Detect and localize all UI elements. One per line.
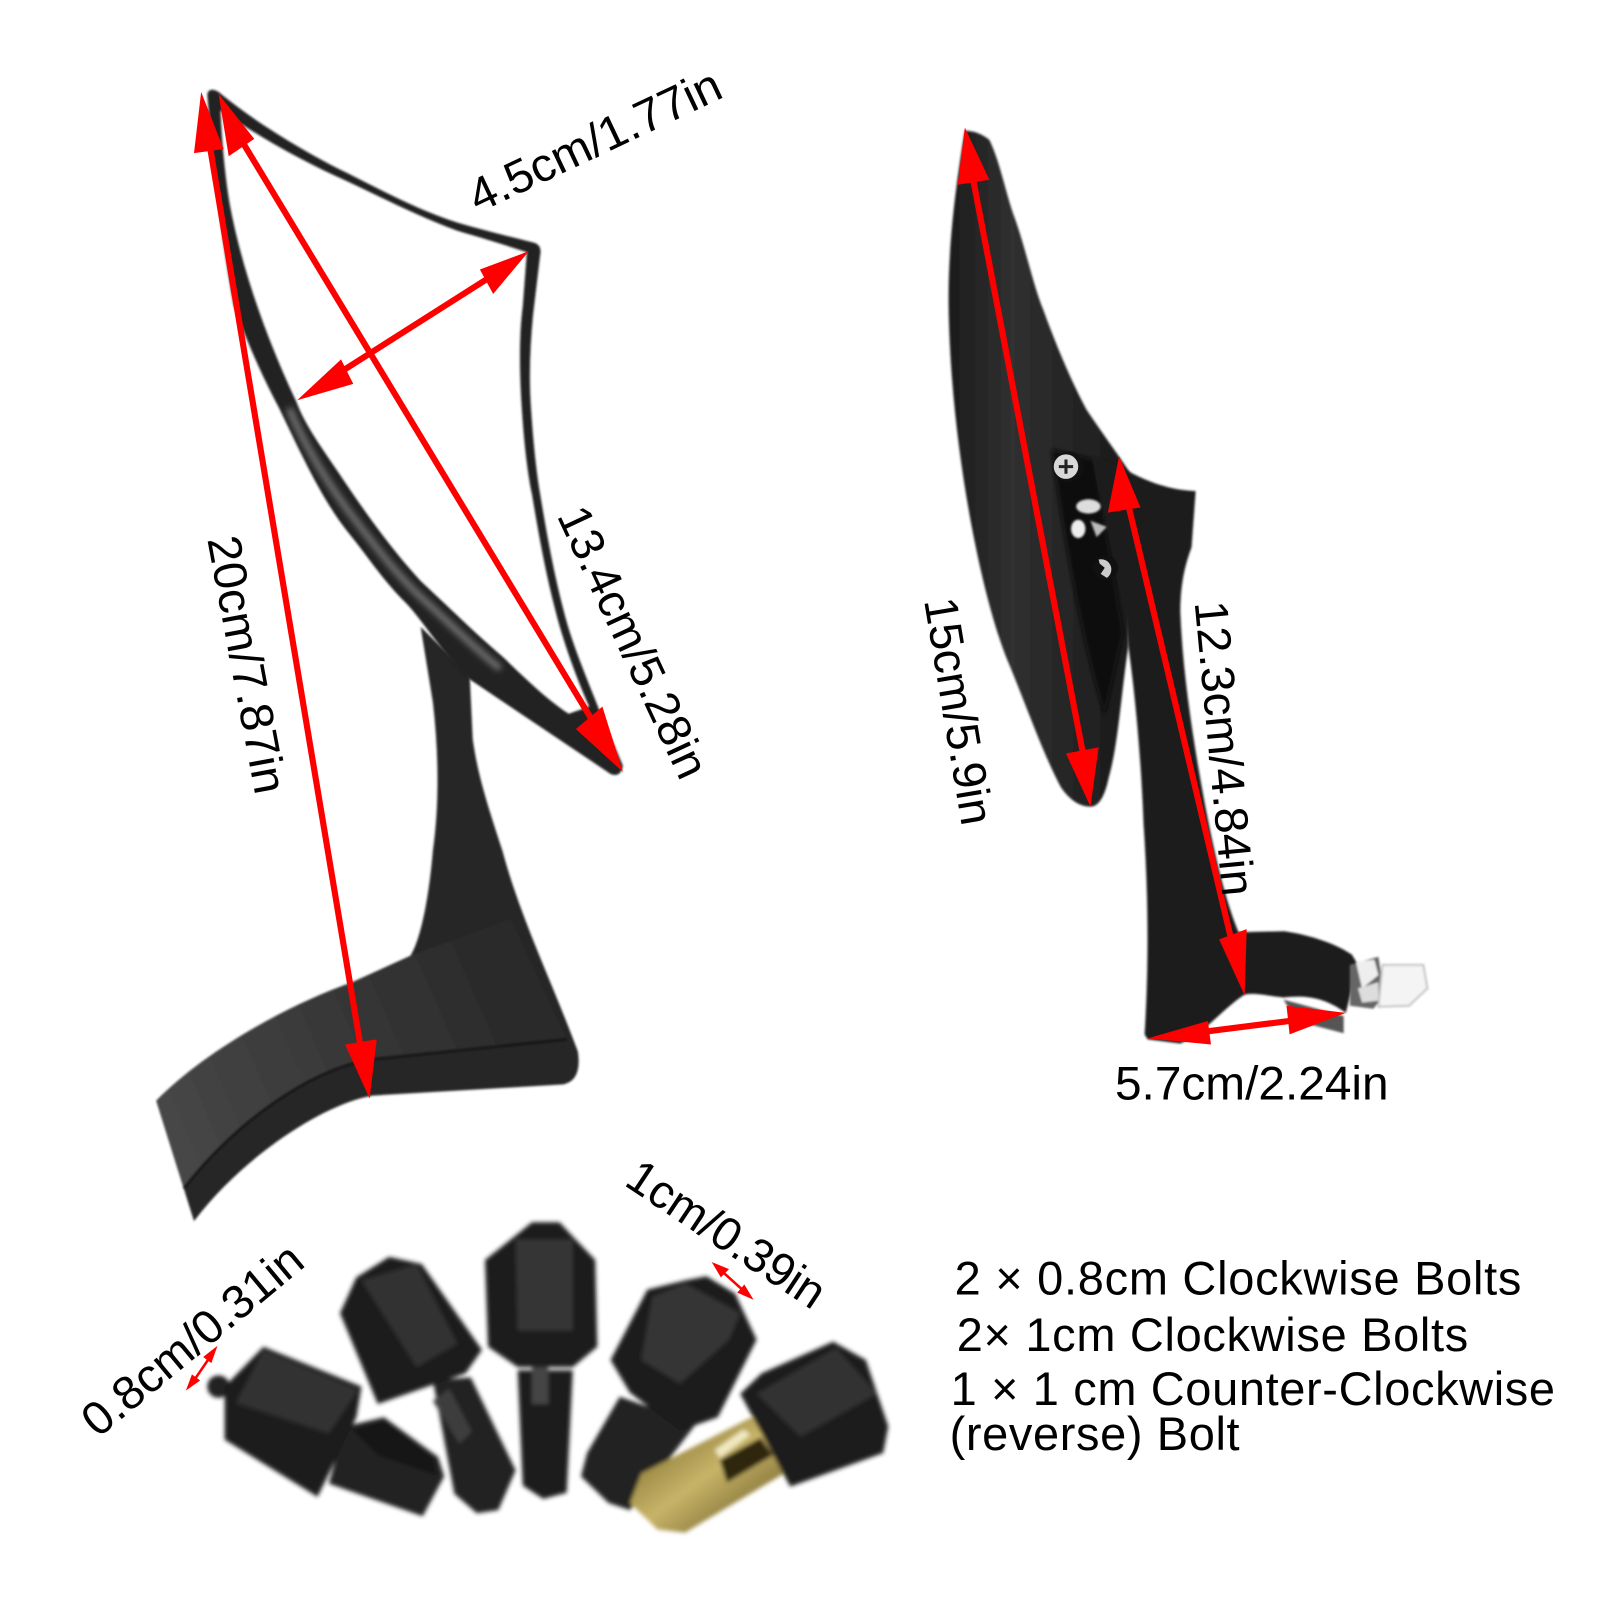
bolt 3	[485, 1222, 597, 1499]
label: 12.3cm: 12.3cm/4.84in	[1185, 598, 1265, 898]
mirror stand	[156, 627, 579, 1221]
head shading	[1052, 449, 1123, 715]
bolt 5 with gold thread	[630, 1342, 888, 1533]
label: 15cm: 15cm/5.9in	[914, 593, 1004, 829]
label: 20cm height: 20cm/7.87in	[197, 531, 298, 798]
stem and arm	[1091, 455, 1358, 1044]
arrow: overall height 20cm	[194, 92, 377, 1099]
arrow: stem length 12.3cm	[1108, 456, 1247, 996]
arrow: arm width 5.7cm	[1148, 1006, 1346, 1045]
arrow: mirror length 13.4cm	[219, 94, 623, 772]
list line 1: 2 × 0.8cm Clockwise Bolts	[955, 1252, 1521, 1305]
label: 1cm bolt: 1cm/0.39in	[617, 1149, 836, 1319]
arrow: mirror width 4.5cm	[297, 251, 529, 400]
bolt 1	[207, 1347, 444, 1516]
screw: middle	[1071, 499, 1107, 538]
screw: top	[1053, 451, 1083, 482]
mirror frame	[207, 90, 623, 775]
screw: bottom	[1094, 555, 1118, 580]
threaded bolt tip	[1350, 957, 1427, 1009]
rim highlight	[289, 408, 500, 669]
label: 13.4cm length: 13.4cm/5.28in	[547, 497, 720, 786]
arrow: head length 15cm	[958, 128, 1099, 807]
label: 4.5cm width: 4.5cm/1.77in	[459, 58, 730, 222]
five mounting bolts	[207, 1222, 888, 1533]
bolt 2	[340, 1257, 516, 1513]
bolt quantity list	[950, 1252, 1555, 1460]
label: 5.7cm: 5.7cm/2.24in	[1115, 1057, 1389, 1110]
mirror head	[949, 131, 1129, 807]
bolt 4	[581, 1276, 757, 1510]
list line 3: 1 × 1 cm Counter-Clockwise	[951, 1362, 1555, 1415]
arrow: 1cm bolt width	[712, 1262, 754, 1300]
left mirror: front view	[156, 58, 730, 1221]
arm underside	[1283, 1000, 1344, 1033]
list line 2: 2× 1cm Clockwise Bolts	[957, 1308, 1468, 1361]
arrow: 0.8cm bolt width	[186, 1346, 217, 1391]
label: 0.8cm bolt: 0.8cm/0.31in	[71, 1232, 313, 1446]
list line 4: (reverse) Bolt	[950, 1407, 1240, 1460]
right mirror: side view	[914, 128, 1427, 1110]
